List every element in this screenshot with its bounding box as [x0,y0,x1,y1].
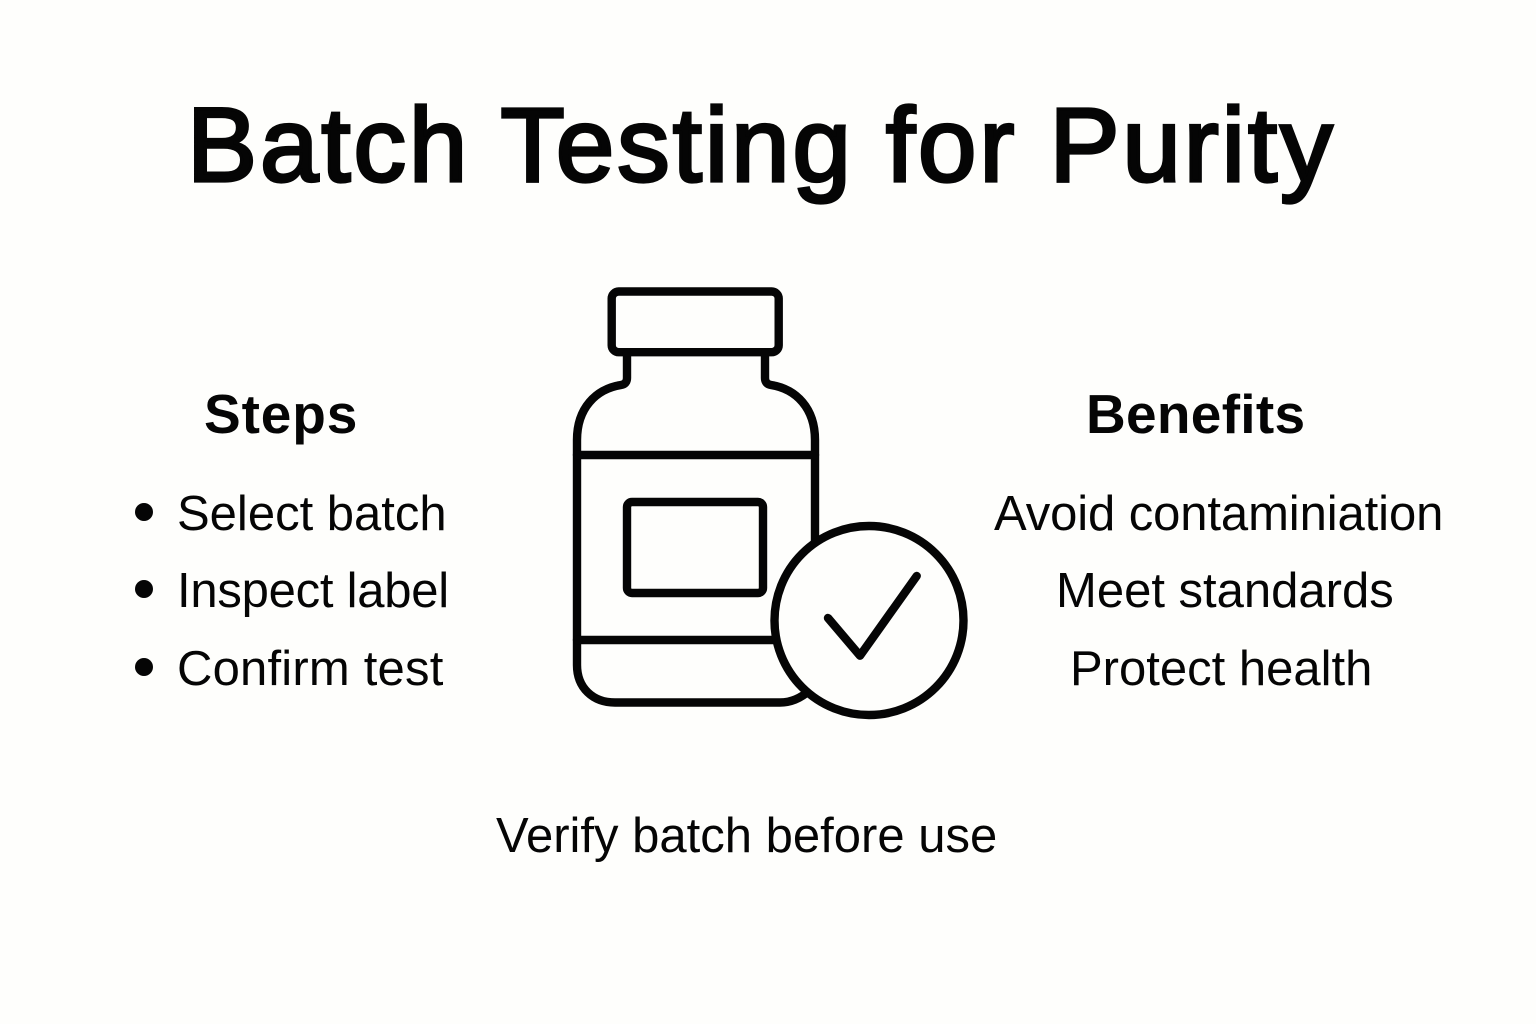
check mark [828,576,917,656]
title: Batch Testing for Purity [187,87,1336,204]
benefit 1: Avoid contaminiation [994,487,1443,541]
step 2: Inspect label [177,564,449,618]
icon: bottle with check badge [572,287,968,720]
step 3: Confirm test [177,642,444,696]
check badge [774,526,964,715]
steps list [135,487,449,696]
label bands [577,455,815,640]
panel: steps [135,383,449,696]
benefit 3: Protect health [1070,642,1372,696]
benefit 2: Meet standards [1056,564,1394,618]
label box [627,502,763,593]
step 1: Select batch [177,487,447,541]
panel: benefits [994,383,1443,696]
bottle cap [612,292,779,352]
bottle body [577,353,815,702]
benefits heading: Benefits [1086,383,1305,445]
footer caption: Verify batch before use [496,809,997,863]
steps heading: Steps [204,383,358,445]
